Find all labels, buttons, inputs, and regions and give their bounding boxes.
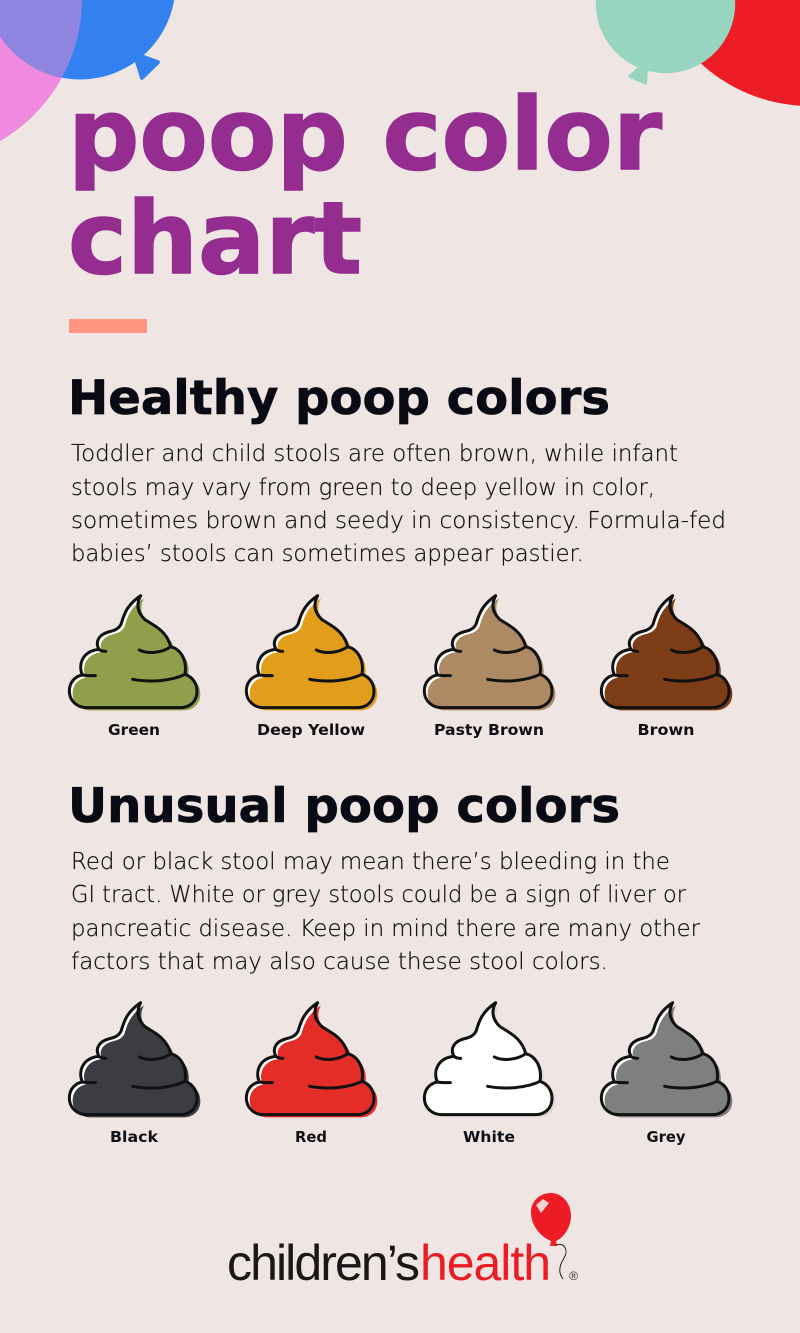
title: chart xyxy=(68,180,362,297)
logo wordmark: children’s xyxy=(227,1235,420,1291)
text block: unusual description: pancreatic disease. Keep in mind there are many other xyxy=(71,914,700,942)
label: red: Red xyxy=(295,1128,327,1146)
icon: deep yellow poop xyxy=(246,596,377,710)
text block: healthy description: Toddler and child stools are often brown, while infant xyxy=(71,439,678,467)
balloons: top left xyxy=(0,0,174,141)
text block: healthy description xyxy=(71,439,726,567)
text block: unusual description: Red or black stool may mean there’s bleeding in the xyxy=(71,847,670,875)
label: pasty brown: Pasty Brown xyxy=(434,721,544,739)
text block: unusual description: factors that may also cause these stool colors. xyxy=(71,947,608,975)
label: green: Green xyxy=(108,721,160,739)
text block: unusual description: GI tract. White or grey stools could be a sign of liver or xyxy=(71,880,686,908)
title: poop color xyxy=(68,76,663,193)
label: black: Black xyxy=(110,1128,159,1146)
icon: red poop xyxy=(246,1003,377,1117)
balloons: top right xyxy=(596,0,800,106)
label: deep yellow: Deep Yellow xyxy=(257,721,365,739)
logo wordmark: health xyxy=(420,1235,551,1291)
registered mark: ® xyxy=(569,1269,578,1283)
text block: healthy description: stools may vary from green to deep yellow in color, xyxy=(71,473,655,501)
text block: healthy description: sometimes brown and seedy in consistency. Formula-fed xyxy=(71,506,726,534)
logo: children's health xyxy=(227,1193,578,1291)
label: grey: Grey xyxy=(646,1128,686,1146)
logo balloon xyxy=(531,1193,571,1279)
label: white: White xyxy=(463,1128,515,1146)
heading: healthy poop colors: Healthy poop colors xyxy=(68,371,610,426)
icon: green poop xyxy=(69,596,200,710)
icon: black poop xyxy=(69,1003,200,1117)
logo wordmark xyxy=(227,1235,551,1291)
icon: white poop xyxy=(424,1003,555,1117)
heading: unusual poop colors: Unusual poop colors xyxy=(68,779,620,834)
accent bar xyxy=(69,319,147,333)
icon: grey poop xyxy=(601,1003,732,1117)
text block: unusual description xyxy=(71,847,700,975)
icon: brown poop xyxy=(601,596,732,710)
title xyxy=(68,76,663,297)
label: brown: Brown xyxy=(638,721,694,739)
icon: pasty brown poop xyxy=(424,596,555,710)
text block: healthy description: babies’ stools can sometimes appear pastier. xyxy=(71,539,584,567)
